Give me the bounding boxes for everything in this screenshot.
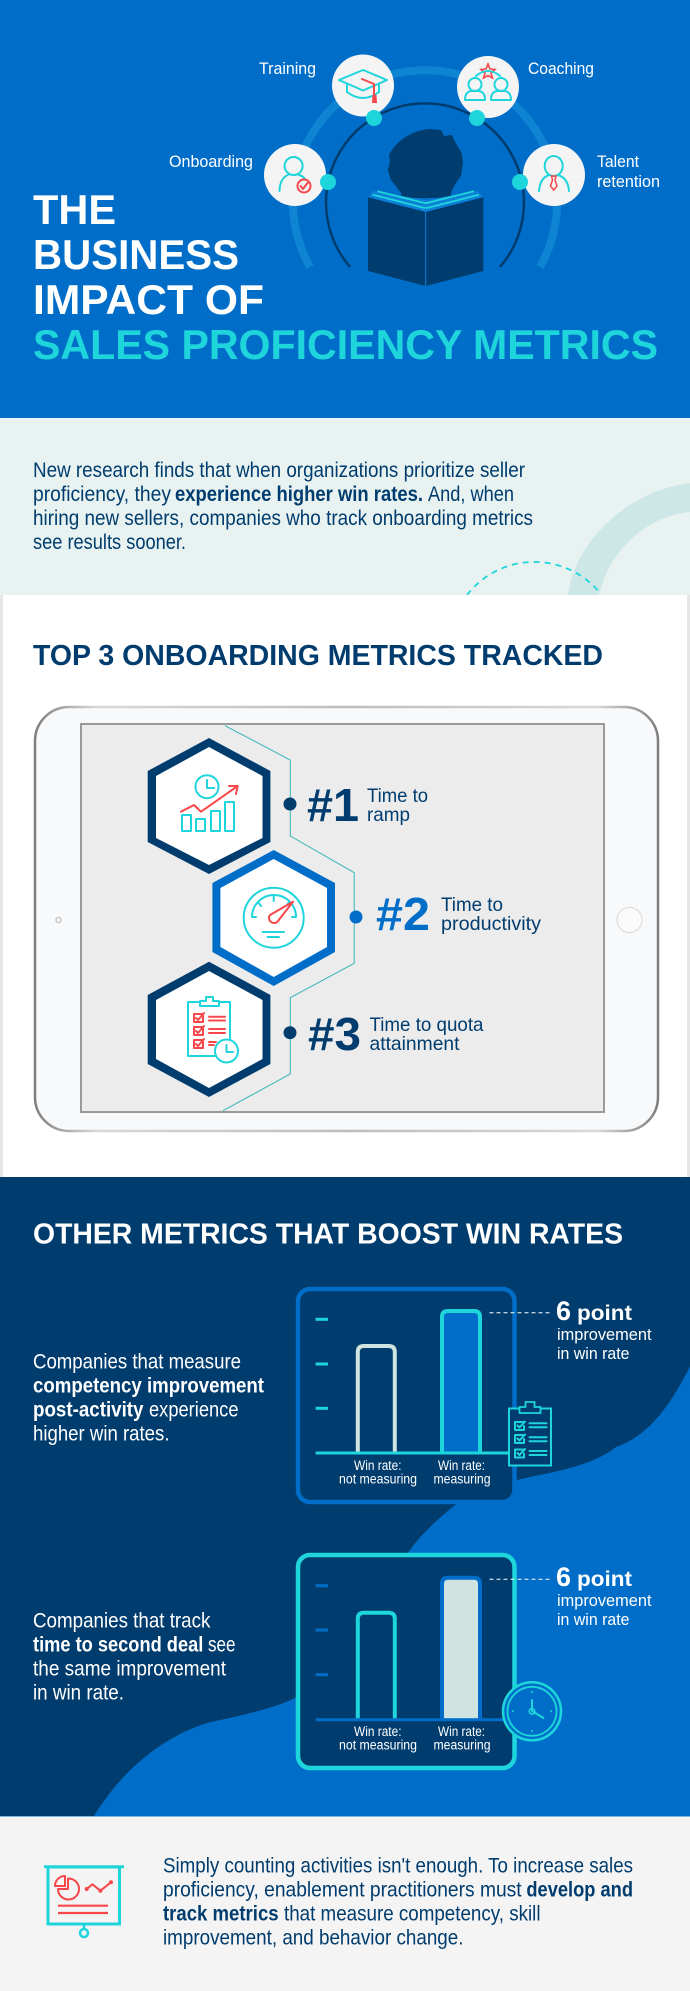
panel: header [0, 0, 690, 418]
text: time to second deal: time to second deal [33, 1633, 203, 1656]
callout: 6 point improvement [490, 1562, 652, 1629]
bar chart: time to second deal: not measuring [339, 1737, 417, 1752]
text: intro paragraph: proficiency, they [33, 483, 171, 506]
text: conclusion paragraph [163, 1855, 633, 1950]
callout: 6 point improvement: point [577, 1302, 632, 1325]
bar chart: competency improvement [298, 1289, 514, 1502]
connector line [223, 726, 354, 1111]
bar: measuring [442, 1578, 480, 1719]
icon: onboarding [264, 144, 336, 206]
title: IMPACT OF [33, 276, 264, 323]
metric 1: time to ramp [148, 738, 428, 874]
icon: training [332, 54, 394, 126]
icon: presentation board [44, 1867, 124, 1937]
metric 1: time to ramp: #1 [307, 779, 359, 831]
bar chart: competency improvement: not measuring [339, 1471, 417, 1486]
label: Onboarding: Onboarding [169, 152, 253, 171]
label: Talent retention: Talent [597, 152, 639, 171]
callout: 6 point improvement: point [577, 1568, 632, 1591]
bar chart: competency improvement: Win rate: [438, 1458, 485, 1473]
text: time to second deal: Companies that track [33, 1609, 211, 1632]
text: competency improvement: experience [149, 1398, 238, 1421]
text: competency improvement: competency improvement [33, 1374, 264, 1397]
icon: clock [503, 1682, 561, 1740]
metric 1: time to ramp: ramp [367, 804, 410, 826]
callout: 6 point improvement: improvement [557, 1325, 652, 1344]
text: time to second deal [33, 1609, 236, 1704]
metric 2: time to productivity: #2 [376, 888, 430, 940]
metric 2: time to productivity [212, 850, 541, 986]
bar: measuring [442, 1311, 480, 1453]
text: intro paragraph [33, 459, 533, 554]
bar chart: time to second deal: Win rate: [438, 1724, 485, 1739]
illustration: reader with arcs [293, 70, 557, 286]
text: conclusion paragraph: develop and [526, 1879, 633, 1902]
text: intro paragraph: see results sooner. [33, 531, 186, 554]
text: intro paragraph: experience higher win rates. [175, 483, 423, 506]
icon: clipboard [188, 997, 238, 1062]
heading: TOP 3 ONBOARDING METRICS TRACKED [33, 640, 603, 672]
heading: OTHER METRICS THAT BOOST WIN RATES [33, 1219, 623, 1251]
metric 3: time to quota attainment [148, 962, 484, 1097]
metric 3: time to quota attainment: Time to quota [370, 1014, 484, 1036]
text: intro paragraph: New research finds that when organizations prioritize seller [33, 459, 525, 482]
bar chart: competency improvement: measuring [434, 1471, 490, 1486]
text: time to second deal: the same improvement [33, 1657, 226, 1680]
text: intro paragraph: hiring new sellers, companies who track onboarding metrics [33, 507, 533, 530]
text: conclusion paragraph: improvement, and behavior change. [163, 1927, 464, 1950]
metric 3: time to quota attainment: #3 [308, 1008, 361, 1060]
bar chart: time to second deal: measuring [434, 1737, 490, 1752]
bar: not measuring [358, 1346, 395, 1453]
text: intro paragraph: And, when [428, 483, 514, 506]
label: Talent retention [597, 152, 660, 191]
icon: coaching [457, 56, 519, 126]
metric 1: time to ramp: Time to [367, 785, 428, 807]
title: THE [33, 186, 116, 233]
icon: clipboard checklist [509, 1402, 551, 1466]
text: conclusion paragraph: that measure competency, skill [284, 1903, 540, 1926]
metric 2: time to productivity: Time to [441, 894, 503, 916]
callout: 6 point improvement: 6 [556, 1296, 571, 1326]
callout: 6 point improvement [490, 1296, 652, 1363]
bar: not measuring [358, 1613, 395, 1719]
bar chart: time to second deal: Win rate: [354, 1724, 402, 1739]
panel: top 3 onboarding metrics [0, 595, 690, 1177]
metric 2: time to productivity: productivity [441, 913, 541, 935]
text: competency improvement [33, 1350, 264, 1445]
icon: growth chart [181, 775, 238, 831]
text: conclusion paragraph: track metrics [163, 1903, 279, 1926]
title: SALES PROFICIENCY METRICS [33, 321, 658, 368]
bar chart: competency improvement: Win rate: [354, 1458, 402, 1473]
bar chart: time to second deal [298, 1555, 514, 1768]
title [33, 186, 658, 368]
background wave [94, 1367, 690, 1816]
icon: open book [368, 191, 483, 286]
title: BUSINESS [33, 231, 239, 278]
label: Coaching: Coaching [528, 59, 594, 78]
panel: conclusion [0, 1816, 690, 1991]
icon: talent retention [512, 144, 585, 206]
icon: reader head [388, 129, 463, 198]
icon: gauge [244, 888, 304, 948]
callout: 6 point improvement: improvement [557, 1591, 652, 1610]
text: time to second deal: see [208, 1633, 236, 1656]
text: conclusion paragraph: proficiency, enablement practitioners must [163, 1879, 522, 1902]
callout: 6 point improvement: in win rate [557, 1344, 630, 1363]
label: Talent retention: retention [597, 172, 660, 191]
callout: 6 point improvement: 6 [556, 1562, 571, 1592]
tablet frame [35, 707, 658, 1131]
text: competency improvement: Companies that measure [33, 1350, 241, 1373]
metric 3: time to quota attainment: attainment [370, 1033, 460, 1055]
text: competency improvement: post-activity [33, 1398, 144, 1421]
text: conclusion paragraph: Simply counting activities isn't enough. To increase sales [163, 1855, 633, 1878]
label: Training: Training [259, 59, 316, 78]
text: time to second deal: in win rate. [33, 1681, 124, 1704]
panel: other metrics [0, 1177, 690, 1816]
text: competency improvement: higher win rates. [33, 1422, 170, 1445]
panel: introduction [0, 418, 690, 595]
callout: 6 point improvement: in win rate [557, 1610, 630, 1629]
